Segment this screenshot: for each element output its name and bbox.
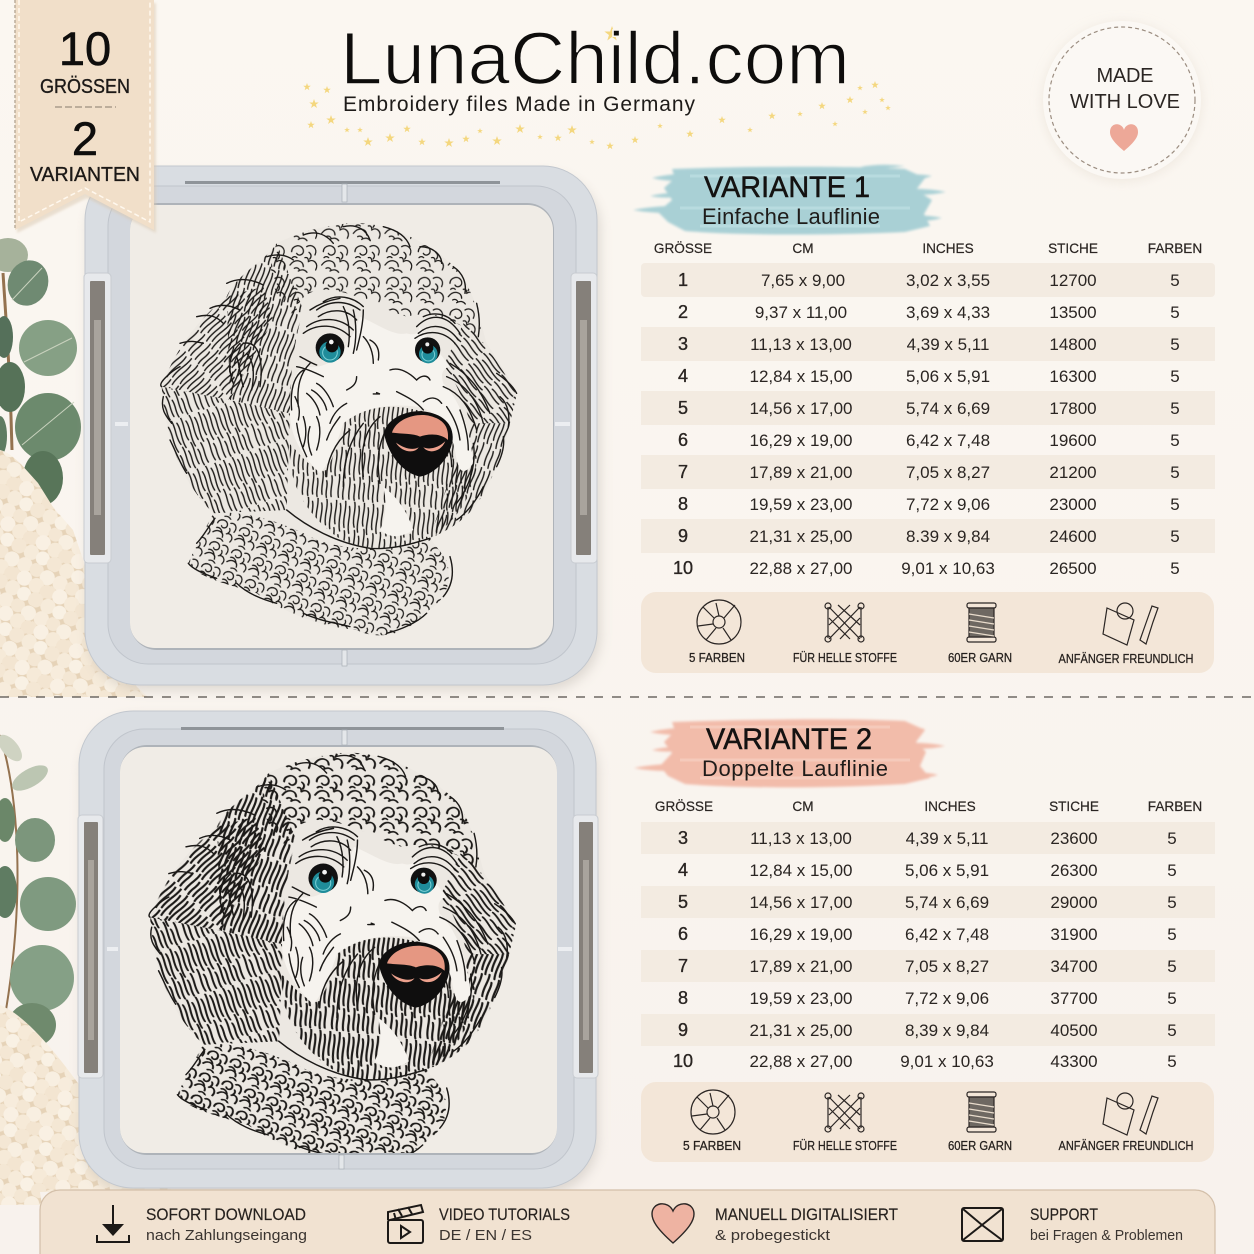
row: 7,72 x 9,06 [906,495,990,514]
row: 4 [678,366,688,386]
row: 26300 [1050,861,1098,880]
blanket bottom [0,1005,172,1205]
text: manuell digitalisiert: MANUELL DIGITALISIERT [715,1206,898,1224]
table: variante 2 [641,799,1215,1071]
row: 7,05 x 8,27 [906,463,990,482]
row: 29000 [1050,893,1098,912]
icon: net [825,1093,864,1132]
row [678,430,1180,450]
heading: variante 2: VARIANTE 2 [706,723,872,756]
clamp left [84,273,111,563]
row: 11,13 x 13,00 [750,335,852,354]
row: 23000 [1049,495,1097,514]
brush stroke [634,719,945,787]
row: 10 [673,558,693,578]
icon: envelope [962,1208,1003,1241]
icon: heart [1110,124,1138,151]
table header: INCHES [922,241,974,256]
row: 21200 [1049,463,1097,482]
row: 5 [678,398,688,418]
table header [655,799,1202,814]
row: 3,69 x 4,33 [906,303,990,322]
row: 13500 [1049,303,1097,322]
row: 4 [678,860,688,880]
table header: CM [792,799,814,814]
row: 5 [1170,335,1180,354]
row: 6,42 x 7,48 [906,431,990,450]
features panel 2 [641,1082,1214,1162]
label: 60ER GARN [948,1139,1012,1153]
table header: GRÖSSE [654,241,712,256]
row: 19,59 x 23,00 [749,495,853,514]
clamp right [571,273,597,563]
table header: INCHES [924,799,976,814]
row: 5 [1167,893,1177,912]
row: 22,88 x 27,00 [749,1052,853,1071]
text: manuell digitalisiert [715,1206,898,1244]
row [678,334,1180,354]
icon: thread spool [967,603,996,642]
row [678,1020,1177,1040]
label: 5 FARBEN [683,1139,741,1153]
icon: download [97,1205,129,1242]
row: 7,05 x 8,27 [905,957,989,976]
row: 9 [678,1020,688,1040]
row: 1 [678,270,688,290]
row: 5,06 x 5,91 [906,367,990,386]
logo subtitle: Embroidery files Made in Germany [343,93,696,116]
row: 40500 [1050,1021,1098,1040]
table header: FARBEN [1148,799,1202,814]
dog embroidery 1 [161,223,517,635]
row: 17,89 x 21,00 [749,463,853,482]
row: 6 [678,430,688,450]
dashed divider [0,696,1254,698]
heading: variante 2: Doppelte Lauflinie [702,756,888,781]
row: 5 [1170,367,1180,386]
row: 14800 [1049,335,1097,354]
icon: colours disc [697,600,741,644]
row [678,270,1180,290]
features panel 1 [641,592,1214,673]
row: 22,88 x 27,00 [749,559,853,578]
row: 37700 [1050,989,1098,1008]
row [678,302,1180,322]
row: 5 [1170,431,1180,450]
row [678,828,1177,848]
leaves bottom [0,731,76,1047]
text: manuell digitalisiert: & probegestickt [715,1227,831,1244]
banner ribbon: GRÖSSEN [40,76,130,98]
blanket top [0,450,148,697]
row: 31900 [1050,925,1098,944]
badge: made with love [1043,21,1201,181]
text: sofort download: SOFORT DOWNLOAD [146,1206,306,1224]
label: FÜR HELLE STOFFE [793,1139,897,1153]
row: 5 [1167,829,1177,848]
text: support [1030,1206,1183,1244]
icon: heart [652,1204,694,1243]
row [678,494,1180,514]
heading: variante 2 [634,719,945,787]
banner ribbon: 2 [72,112,98,165]
row: 5 [1167,989,1177,1008]
row: 8,39 x 9,84 [905,1021,989,1040]
row: 6 [678,924,688,944]
table header: STICHE [1048,241,1098,256]
row: 9,37 x 11,00 [755,303,847,322]
row: 16,29 x 19,00 [749,431,853,450]
text: sofort download: nach Zahlungseingang [146,1227,307,1244]
row: 12700 [1049,271,1097,290]
dog embroidery 2 [149,753,516,1167]
row [673,558,1180,578]
row: 5 [1167,861,1177,880]
clamp left [78,815,103,1078]
row: 7 [678,462,688,482]
icon: fabric and marker [1103,603,1158,645]
row: 4,39 x 5,11 [906,829,988,848]
text: sofort download [146,1206,307,1244]
text: support: bei Fragen & Problemen [1030,1227,1183,1244]
row: 14,56 x 17,00 [749,399,853,418]
row [678,892,1177,912]
row: 5,06 x 5,91 [905,861,989,880]
table header [654,241,1202,256]
row [673,1051,1177,1071]
row: 43300 [1050,1052,1098,1071]
hoop frame 1 [84,166,600,690]
leaves top [0,238,81,505]
row: 16,29 x 19,00 [749,925,853,944]
row: 17,89 x 21,00 [749,957,853,976]
row: 3 [678,828,688,848]
banner ribbon: 10 [59,22,111,75]
text: video tutorials [439,1206,570,1244]
row: 14,56 x 17,00 [749,893,853,912]
row: 16300 [1049,367,1097,386]
row: 7,72 x 9,06 [905,989,989,1008]
label: FÜR HELLE STOFFE [793,651,897,665]
row: 7 [678,956,688,976]
logo title: LunaChild.com [340,17,850,100]
row: 5 [1170,495,1180,514]
table header: CM [792,241,814,256]
icon: net [825,603,864,642]
row: 5,74 x 6,69 [906,399,990,418]
bottom bar [40,1190,1215,1254]
row: 10 [673,1051,693,1071]
icon: colours disc [691,1090,735,1134]
row: 5 [1170,399,1180,418]
row: 3,02 x 3,55 [906,271,990,290]
row: 5,74 x 6,69 [905,893,989,912]
row [678,956,1177,976]
hoop frame 2 [78,711,598,1194]
row: 5 [1167,1052,1177,1071]
table header: STICHE [1049,799,1099,814]
heading: variante 1: VARIANTE 1 [704,171,870,204]
row: 26500 [1049,559,1097,578]
icon: fabric and marker [1103,1093,1158,1135]
row [678,398,1180,418]
badge: made with love: WITH LOVE [1070,91,1180,113]
label: ANFÄNGER FREUNDLICH [1058,1139,1194,1153]
table: variante 1 [641,241,1215,578]
row: 8 [678,494,688,514]
badge: made with love: MADE [1096,65,1154,87]
row: 34700 [1050,957,1098,976]
row: 9,01 x 10,63 [900,1052,994,1071]
stars garland [303,26,891,149]
row: 5 [1170,559,1180,578]
row [678,924,1177,944]
row: 5 [678,892,688,912]
row [678,366,1180,386]
row [678,462,1180,482]
row: 12,84 x 15,00 [749,367,853,386]
label: ANFÄNGER FREUNDLICH [1058,652,1194,666]
row: 24600 [1049,527,1097,546]
banner ribbon: VARIANTEN [30,164,140,186]
icon: clapperboard [388,1205,423,1243]
row: 5 [1170,271,1180,290]
row: 6,42 x 7,48 [905,925,989,944]
row [678,860,1177,880]
row: 9,01 x 10,63 [901,559,995,578]
row: 5 [1170,303,1180,322]
row: 11,13 x 13,00 [750,829,852,848]
table header: GRÖSSE [655,799,713,814]
row: 19,59 x 23,00 [749,989,853,1008]
text: support: SUPPORT [1030,1206,1098,1224]
row: 23600 [1050,829,1098,848]
row: 19600 [1049,431,1097,450]
label: 5 FARBEN [689,651,745,665]
banner ribbon [15,0,156,233]
row: 7,65 x 9,00 [761,271,845,290]
table header: FARBEN [1148,241,1202,256]
row: 5 [1170,463,1180,482]
heading: variante 1 [633,165,946,235]
row: 12,84 x 15,00 [749,861,853,880]
row [678,988,1177,1008]
row: 17800 [1049,399,1097,418]
row: 5 [1170,527,1180,546]
row: 2 [678,302,688,322]
row: 3 [678,334,688,354]
row: 8.39 x 9,84 [906,527,990,546]
row [678,526,1180,546]
row: 5 [1167,925,1177,944]
icon: thread spool [967,1092,996,1132]
row: 4,39 x 5,11 [907,335,989,354]
row: 5 [1167,1021,1177,1040]
clamp right [573,815,598,1078]
row: 5 [1167,957,1177,976]
heading: variante 1: Einfache Lauflinie [702,204,880,229]
row: 8 [678,988,688,1008]
row: 9 [678,526,688,546]
text: video tutorials: DE / EN / ES [439,1227,532,1244]
label: 60ER GARN [948,651,1012,665]
brush stroke [633,165,946,235]
row: 21,31 x 25,00 [749,527,853,546]
text: video tutorials: VIDEO TUTORIALS [439,1206,570,1224]
row: 21,31 x 25,00 [749,1021,853,1040]
